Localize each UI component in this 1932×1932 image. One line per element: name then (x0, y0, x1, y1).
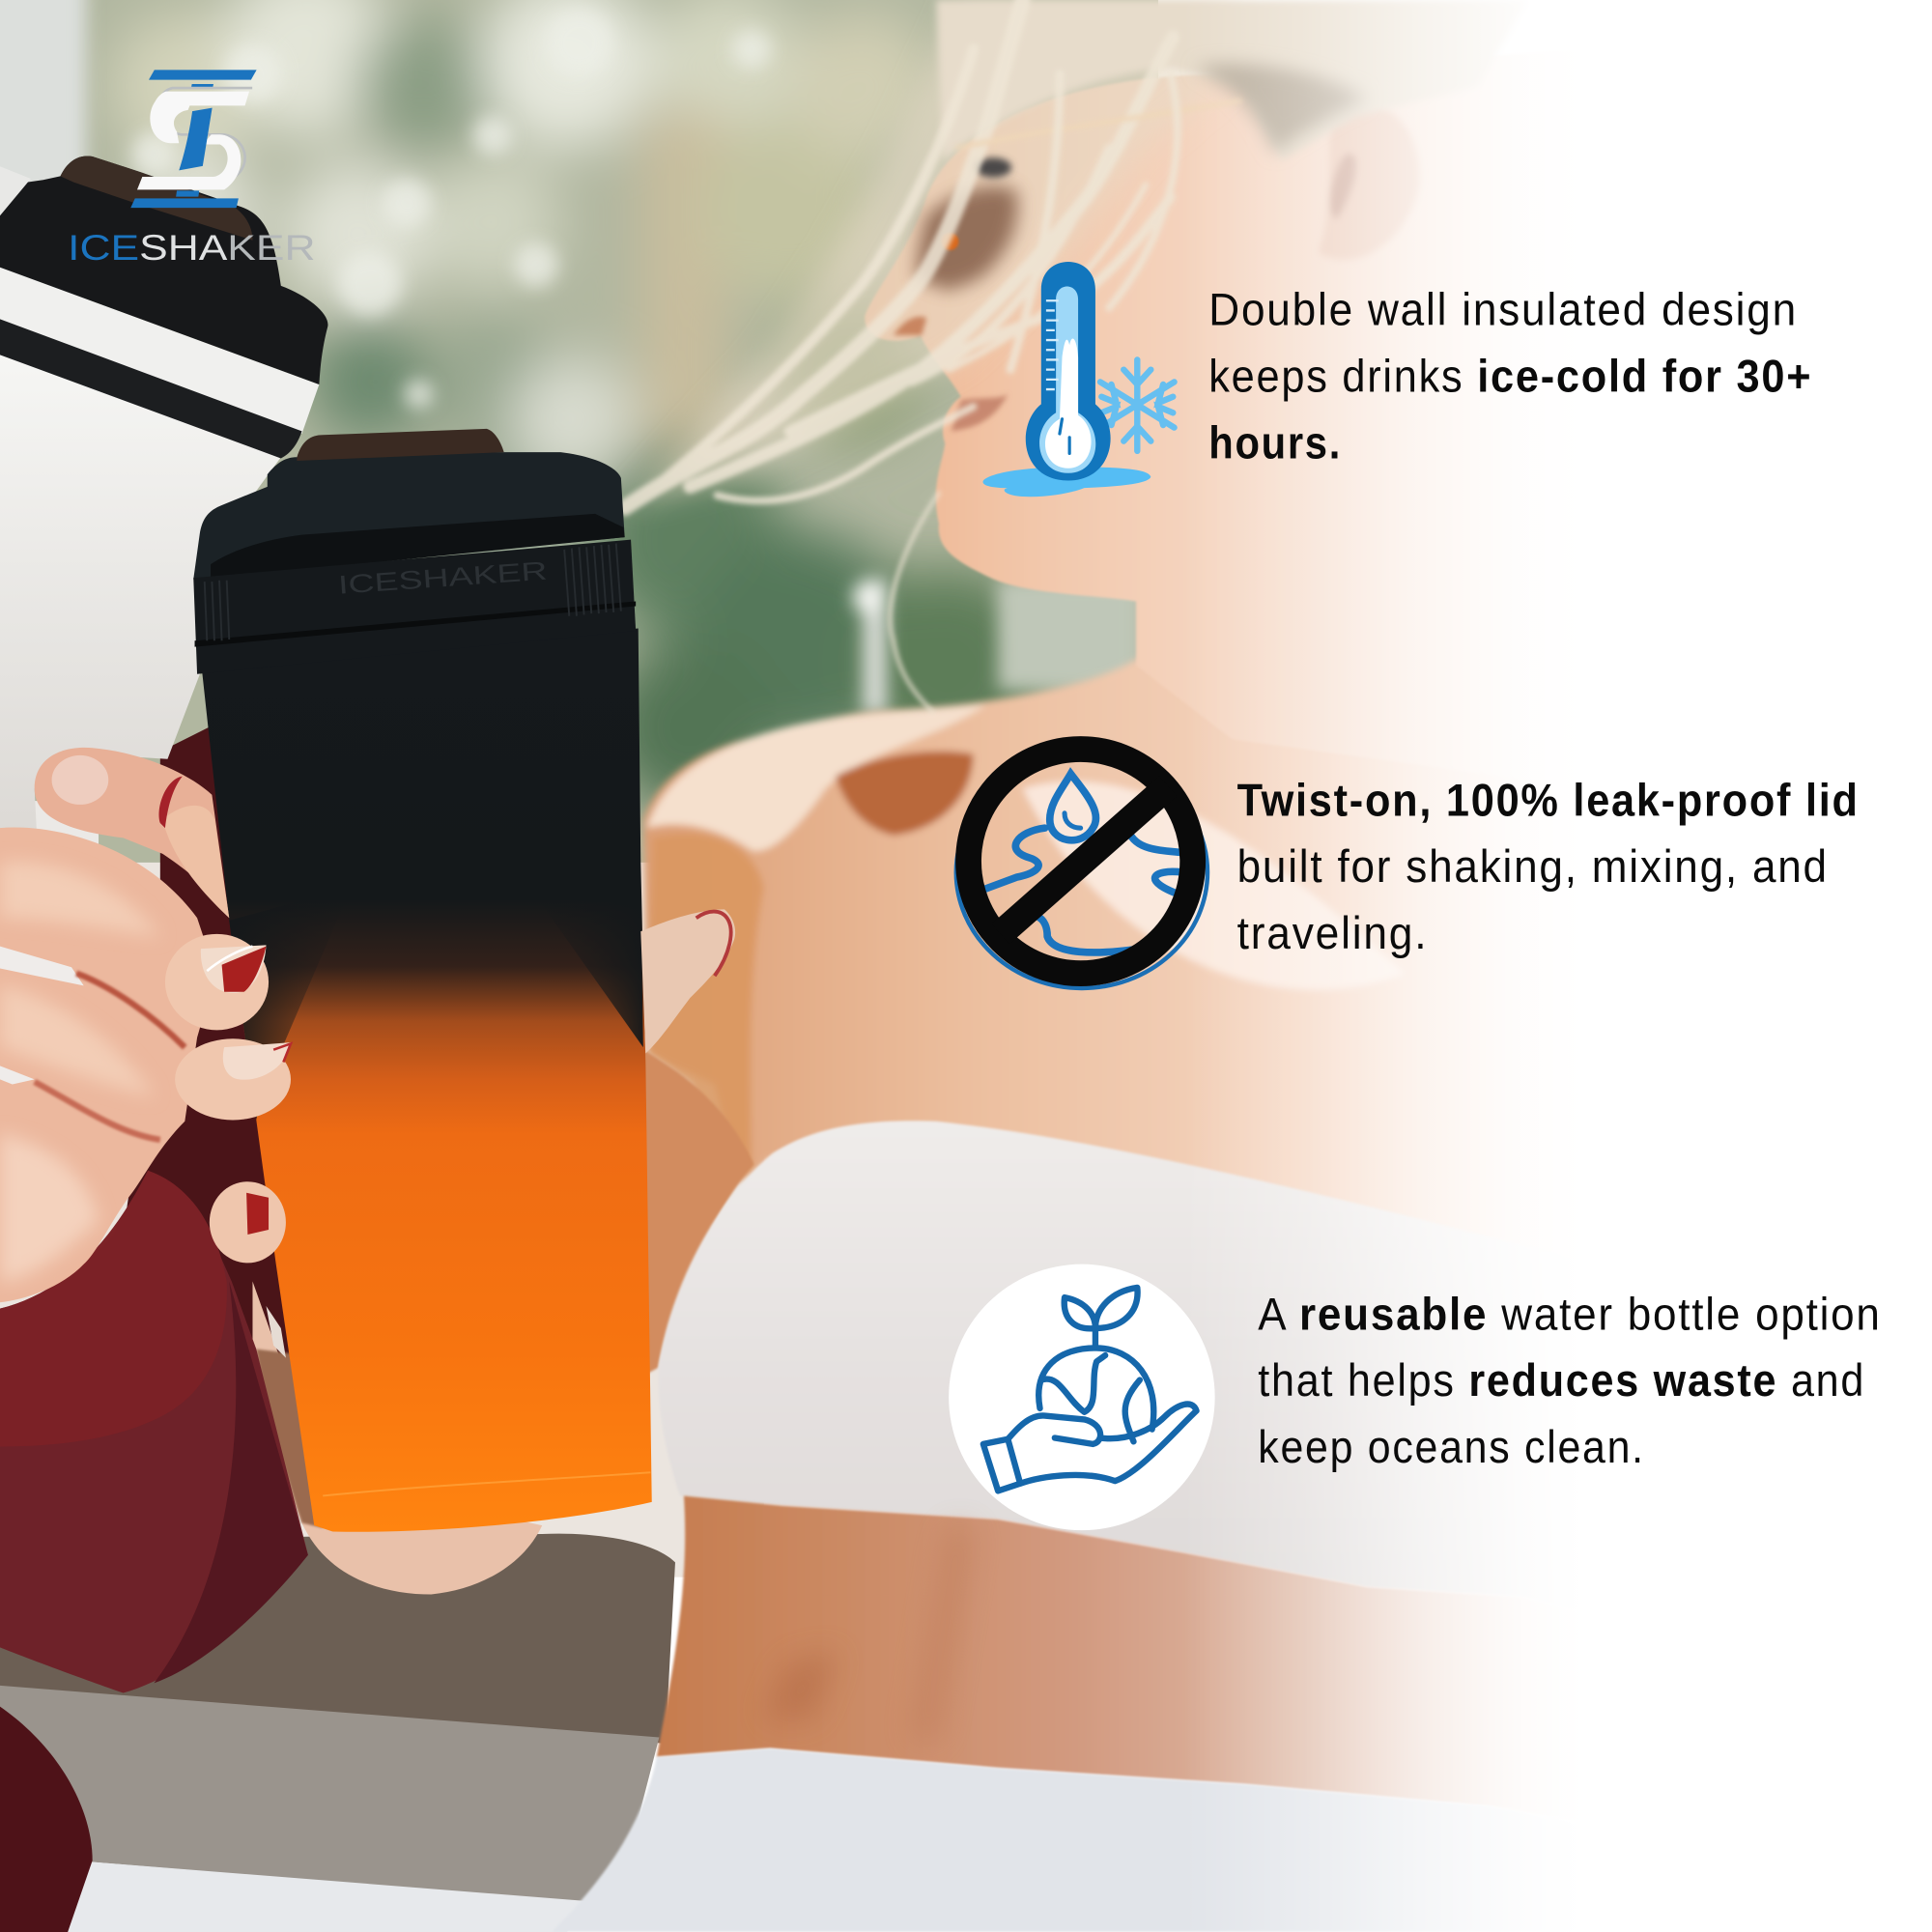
ear (1319, 103, 1420, 260)
lower maroon shape (0, 1707, 93, 1932)
icon: puddle (983, 467, 1151, 497)
photo: woman (552, 0, 1589, 1932)
fingertip with pale nail (175, 1038, 291, 1120)
arm strip beside bottle (640, 1047, 754, 1374)
right hand finger (640, 909, 735, 1054)
dark shadow behind fingers (74, 727, 296, 1368)
red nail (159, 777, 183, 828)
icon: water drop and splash (983, 774, 1182, 952)
white fade on the right (1182, 0, 1583, 1932)
forearm (252, 1282, 542, 1595)
photo background: white floor (62, 1861, 604, 1932)
text: reusable feature (1258, 1289, 1882, 1473)
midriff shading (764, 1528, 974, 1744)
photo background: gray ledge (0, 1686, 659, 1905)
icon: hand holding planet with sprout (949, 1264, 1215, 1530)
sleeve shadow (154, 1282, 308, 1683)
photo background: blurred trees (0, 0, 1158, 887)
text: leak-proof feature (1237, 775, 1860, 959)
photo background: pale backdrop behind bottle (0, 863, 764, 1577)
white bottle (0, 156, 327, 838)
left hand with fingers (0, 748, 291, 1302)
text: insulation feature: hours. (1208, 417, 1342, 469)
icon: ticks (1046, 300, 1059, 389)
text: leak-proof feature: traveling. (1237, 908, 1428, 959)
text: leak-proof feature: built for shaking, mixing, and (1237, 841, 1829, 893)
bottle lid (193, 452, 625, 579)
fingertip with red nail (165, 934, 269, 1030)
arm hair shadow (256, 1350, 323, 1528)
collar grip ridges (205, 543, 621, 640)
text: reusable feature: that helps reduces waste and (1258, 1355, 1865, 1406)
white bottle behind hand (0, 801, 99, 1122)
text: reusable feature: keep oceans clean. (1258, 1422, 1645, 1473)
hair mass (629, 0, 1528, 505)
white top (658, 1121, 1589, 1614)
icon: globe (1038, 1348, 1153, 1430)
bottle collar (193, 540, 636, 674)
face and neck (865, 49, 1589, 788)
photo background: dark ledge (0, 1534, 675, 1744)
icon: melting thermometer with snowflake (983, 262, 1175, 497)
text: insulation feature: keeps drinks ice-cold for 30+ (1208, 352, 1812, 403)
text: reusable feature: A reusable water bottle option (1258, 1289, 1882, 1340)
sleeve and forearm behind bottle (0, 727, 542, 1932)
black to orange bottle (193, 429, 652, 1532)
red nail (696, 912, 731, 976)
icon: snowflake (1100, 359, 1175, 451)
fingertip with red square nail (210, 1181, 286, 1263)
collar embossing: ICESHAKER (337, 556, 548, 600)
sleeve cuff (0, 1171, 227, 1446)
finger tip behind (162, 806, 229, 918)
sleeve body (0, 1171, 308, 1693)
bottle hem line (323, 1472, 650, 1495)
top finger (35, 748, 229, 918)
bottle dark left edge (229, 887, 352, 1120)
logo mark (130, 70, 257, 208)
text: insulation feature: Double wall insulated design (1208, 285, 1798, 336)
icon: sprout (1065, 1288, 1138, 1348)
highlights (0, 862, 160, 1282)
text: leak-proof feature: Twist-on, 100% leak-proof lid (1237, 775, 1860, 826)
icon: thermometer body (1026, 262, 1111, 480)
knuckle gaps (0, 947, 84, 985)
text: insulation feature (1208, 285, 1812, 469)
white waistband (552, 1748, 1589, 1932)
shoulder and chest (643, 659, 1589, 1306)
midriff (657, 1495, 1589, 1824)
icon: no leak sign (956, 750, 1208, 988)
sunglasses and eye (894, 157, 1018, 431)
hair strands (625, 0, 1239, 712)
bokeh highlights (131, 9, 771, 409)
logo (68, 70, 316, 268)
white right margin (1582, 0, 1932, 1932)
logo wordmark: ICE SHA KER (68, 228, 316, 268)
icon: hand (983, 1439, 1020, 1491)
white glint (267, 1306, 286, 1358)
bottle dark right edge (529, 887, 643, 1047)
